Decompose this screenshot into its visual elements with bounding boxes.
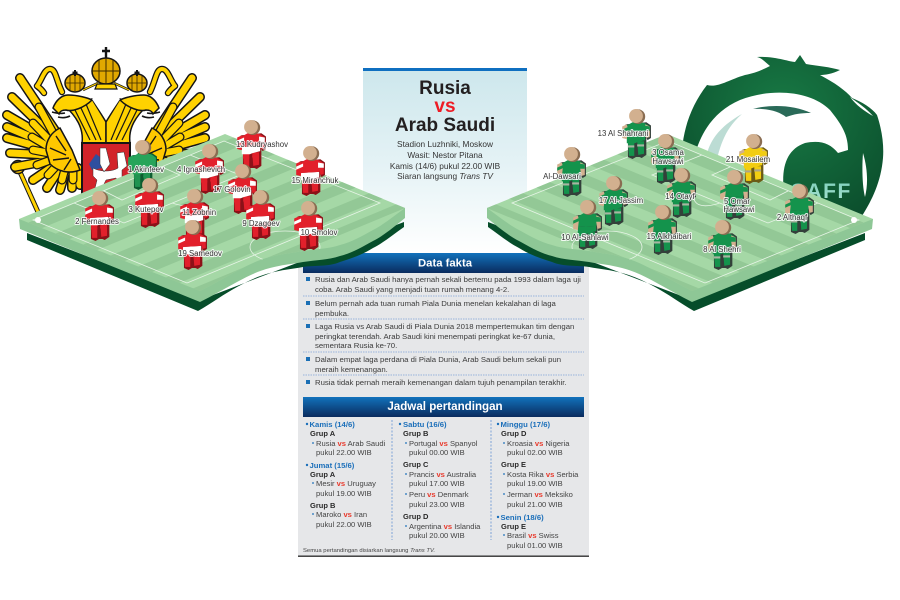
schedule column 2: Grup D <box>403 512 429 521</box>
fact text: sementara Rusia ke-70. <box>315 341 397 350</box>
title: Rusia <box>419 78 471 99</box>
player: Zobnin: 11 Zobnin <box>182 208 216 217</box>
player: Althaqf: 2 Althaqf <box>777 213 808 222</box>
schedule column 1: pukul 19.00 WIB <box>316 489 372 498</box>
player: Samedov <box>178 220 222 270</box>
players: Saudi Arabia <box>543 109 814 270</box>
player: Omar Hawsawi: 5 Omar <box>724 197 750 206</box>
fact text: pembuka. <box>315 309 349 318</box>
fact text: Rusia tidak pernah meraih kemenangan dalam tujuh penampilan terakhir. <box>315 378 567 387</box>
player: Ignashevich <box>177 144 225 194</box>
fact text: Rusia dan Arab Saudi hanya pernah sekali bertemu pada 1993 dalam laga uji <box>315 275 581 284</box>
player: Mosailem: 21 Mosailem <box>726 155 770 164</box>
player: Smolov: 10 Smolov <box>301 228 338 237</box>
large crown <box>92 47 120 89</box>
schedule column 3: Grup E <box>501 522 526 531</box>
pitch: Saudi Arabia <box>465 129 873 311</box>
heading: Data fakta: Data fakta <box>418 258 473 270</box>
schedule column 2: Sabtu (16/6) <box>403 420 447 429</box>
schedule column 3: Kosta Rika vs Serbia <box>507 470 579 479</box>
fact bullets <box>306 277 310 384</box>
player: Zobnin <box>180 189 216 239</box>
fact text: peringkat terendah. Arab Saudi kini menempati peringkat ke-67 dunia, <box>315 332 555 341</box>
player: Otayf: 14 Otayf <box>665 192 696 201</box>
player: Osama Hawsawi: Hawsawi <box>652 157 684 166</box>
player: Mosailem <box>726 134 770 184</box>
player: Omar Hawsawi: Hawsawi <box>723 205 755 214</box>
player: Smolov <box>294 201 338 251</box>
match details: Stadion Luzhniki, Moskow <box>397 139 494 149</box>
schedule column 2: pukul 17.00 WIB <box>409 479 465 488</box>
schedule column 2: pukul 23.00 WIB <box>409 500 465 509</box>
footnote: Semua pertandingan disiarkan langsung Trans TV. <box>303 548 435 554</box>
schedule column 3: Grup E <box>501 460 526 469</box>
schedule column 1: Maroko vs Iran <box>316 510 367 519</box>
player: Fernandes <box>75 191 119 241</box>
player: Miranchuk: 15 Miranchuk <box>292 176 338 185</box>
player: Al-Jassim <box>599 176 643 226</box>
schedule column 2: Prancis vs Australia <box>409 470 477 479</box>
player: Kudryashov: 13 Kudryashov <box>236 140 288 149</box>
schedule column 3: pukul 02.00 WIB <box>507 448 563 457</box>
player: Otayf <box>665 168 696 218</box>
schedule column 1: Rusia vs Arab Saudi <box>316 439 386 448</box>
player: Osama Hawsawi: 3 Osama <box>652 148 684 157</box>
title: Arab Saudi <box>395 115 495 136</box>
schedule column 2: pukul 20.00 WIB <box>409 531 465 540</box>
player: Miranchuk <box>292 146 338 196</box>
schedule column 1: Grup A <box>310 470 336 479</box>
schedule column 3: Minggu (17/6) <box>500 420 550 429</box>
schedule column 2: Argentina vs Islandia <box>409 522 481 531</box>
player: Alkhaibari <box>647 205 692 255</box>
player: Akinfeev: 1 Akinfeev <box>128 165 164 174</box>
player: Ignashevich: 4 Ignashevich <box>177 165 225 174</box>
panel: Jadwal pertandingan <box>298 397 589 557</box>
player: Dzagoev <box>242 190 280 240</box>
schedule column 1: Grup B <box>310 501 336 510</box>
schedule column 1 <box>306 420 386 529</box>
player: Akinfeev <box>128 140 164 190</box>
fact text: Laga Rusia vs Arab Saudi di Piala Dunia 2018 mempertemukan tim dengan <box>315 322 574 331</box>
schedule column 1: Kamis (14/6) <box>310 420 355 429</box>
player: Al Shehri: 8 Al Shehri <box>703 245 741 254</box>
title: vs <box>434 96 456 117</box>
heading: Data fakta <box>303 253 584 273</box>
schedule column 3: pukul 01.00 WIB <box>507 541 563 550</box>
schedule column 2: Peru vs Denmark <box>409 490 469 499</box>
schedule column 3: Senin (18/6) <box>500 513 544 522</box>
panel: Data fakta <box>303 253 584 387</box>
player: Fernandes: 2 Fernandes <box>75 217 119 226</box>
schedule column 1: pukul 22.00 WIB <box>316 448 372 457</box>
schedule column 2: pukul 00.00 WIB <box>409 448 465 457</box>
panel: data and schedule background <box>298 258 589 556</box>
match details: Wasit: Nestor Pitana <box>407 150 483 160</box>
schedule column 3: Brasil vs Swiss <box>507 531 559 540</box>
match details: Kamis (14/6) pukul 22.00 WIB <box>390 161 501 171</box>
heading: Jadwal pertandingan: Jadwal pertandingan <box>387 400 503 413</box>
schedule column 3: Grup D <box>501 429 527 438</box>
player: Althaqf <box>777 184 814 234</box>
match details: Siaran langsung Trans TV <box>397 171 493 181</box>
schedule column 1: pukul 22.00 WIB <box>316 520 372 529</box>
player: Al Shahrani: 13 Al Shahrani <box>598 129 649 138</box>
player: Al-Jassim: 17 Al-Jassim <box>599 196 643 205</box>
schedule column 1: Grup A <box>310 429 336 438</box>
emblem: Saudi Arabian Football Federation <box>682 55 883 240</box>
fact text: Dalam empat laga perdana di Piala Dunia, Arab Saudi belum sekali pun <box>315 355 561 364</box>
player: Al Shahrani <box>598 109 651 159</box>
heading: Jadwal pertandingan <box>303 397 584 417</box>
schedule column 2: Grup B <box>403 429 429 438</box>
player: Al Shehri <box>703 220 741 270</box>
player: Samedov: 19 Samedov <box>178 249 222 258</box>
player: Dzagoev: 9 Dzagoev <box>242 219 280 228</box>
schedule column 1: Mesir vs Uruguay <box>316 479 376 488</box>
sceptre <box>12 160 38 212</box>
player: Al-Dawsari: Al-Dawsari <box>543 172 581 181</box>
player: Al-Sahlawi <box>561 200 609 250</box>
player: Kudryashov <box>236 120 288 170</box>
schedule column 3: Jerman vs Meksiko <box>507 490 573 499</box>
player: Kutepov <box>128 178 164 228</box>
schedule column 1: Jumat (15/6) <box>310 461 355 470</box>
schedule column 2: Portugal vs Spanyol <box>409 439 478 448</box>
player: Al-Sahlawi: 10 Al-Sahlawi <box>561 233 609 242</box>
shield with rider <box>82 143 130 205</box>
pitch: Russia <box>19 129 427 311</box>
schedule column 2 <box>399 420 481 540</box>
player: Kutepov: 3 Kutepov <box>128 205 164 214</box>
panel: match info <box>363 68 527 253</box>
schedule column 3: pukul 21.00 WIB <box>507 500 563 509</box>
player: Golovin: 17 Golovin <box>213 185 251 194</box>
player: Alkhaibari: 15 Alkhaibari <box>647 232 692 241</box>
schedule column 3 <box>497 420 579 550</box>
fact text: coba. Arab Saudi yang menjadi tuan rumah menang 4-2. <box>315 285 509 294</box>
fact text: meraih kemenangan. <box>315 365 388 374</box>
schedule column 2: Grup C <box>403 460 429 469</box>
schedule column 3: Kroasia vs Nigeria <box>507 439 570 448</box>
fact text: Belum pernah ada tuan rumah Piala Dunia menelan kekalahan di laga <box>315 299 557 308</box>
player: Omar Hawsawi <box>720 170 755 220</box>
players: Russia <box>75 120 338 270</box>
player: Al-Dawsari <box>543 147 586 197</box>
player: Osama Hawsawi <box>651 134 684 184</box>
schedule column 3: pukul 19.00 WIB <box>507 479 563 488</box>
emblem: Russian double-headed eagle <box>7 47 205 212</box>
player: Golovin <box>213 164 257 214</box>
SAFF lettering: SAFF <box>791 180 852 203</box>
